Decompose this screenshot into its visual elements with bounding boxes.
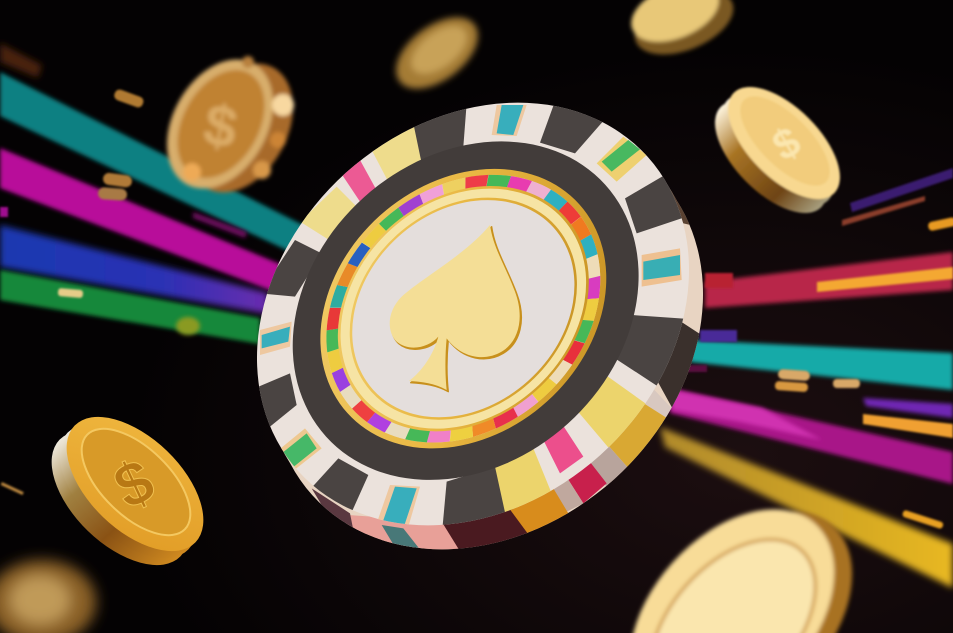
streak: top left ember [0,43,42,78]
coin: upper left: $ [199,92,242,161]
centre gold line [305,152,622,465]
streak: magenta [670,388,953,484]
streak: orange lower [863,414,953,438]
centre disc [308,155,618,462]
poker chip [257,102,703,550]
small lights [0,88,145,495]
chip face stripes [257,102,689,526]
streak: violet lower [863,398,953,418]
streak: blue [0,225,268,314]
coin: bottom left blurred [0,560,96,633]
coin: top right [623,0,743,67]
light streaks: right [660,168,953,588]
inner gold rim [288,135,639,482]
streak: amber core [817,267,953,292]
coin: lower left: $ [104,446,164,523]
streak: teal [690,340,953,390]
spade [390,225,521,392]
streak: teal [0,72,305,254]
light streaks: left [0,43,305,495]
gold ring [264,111,663,506]
coin: bottom right large [590,470,892,633]
multicolour ring [281,128,646,489]
streak: green [0,270,260,344]
pale gold band [292,139,635,478]
streak: violet upper [850,168,953,212]
coin: top centre [383,3,491,103]
streak: magenta [0,148,280,294]
streak: faint magenta [193,212,247,238]
streak: rust upper [842,196,925,226]
coin: upper left [145,41,315,211]
soft yellow dot [176,317,200,335]
streak: red [705,252,953,308]
small lights [687,217,953,529]
streak: yellow [660,427,953,588]
chip edge thickness [282,188,703,550]
coin: lower left [28,393,227,589]
coin: right: $ [764,117,808,170]
coin: right [696,68,859,232]
dark inner band [224,72,707,550]
